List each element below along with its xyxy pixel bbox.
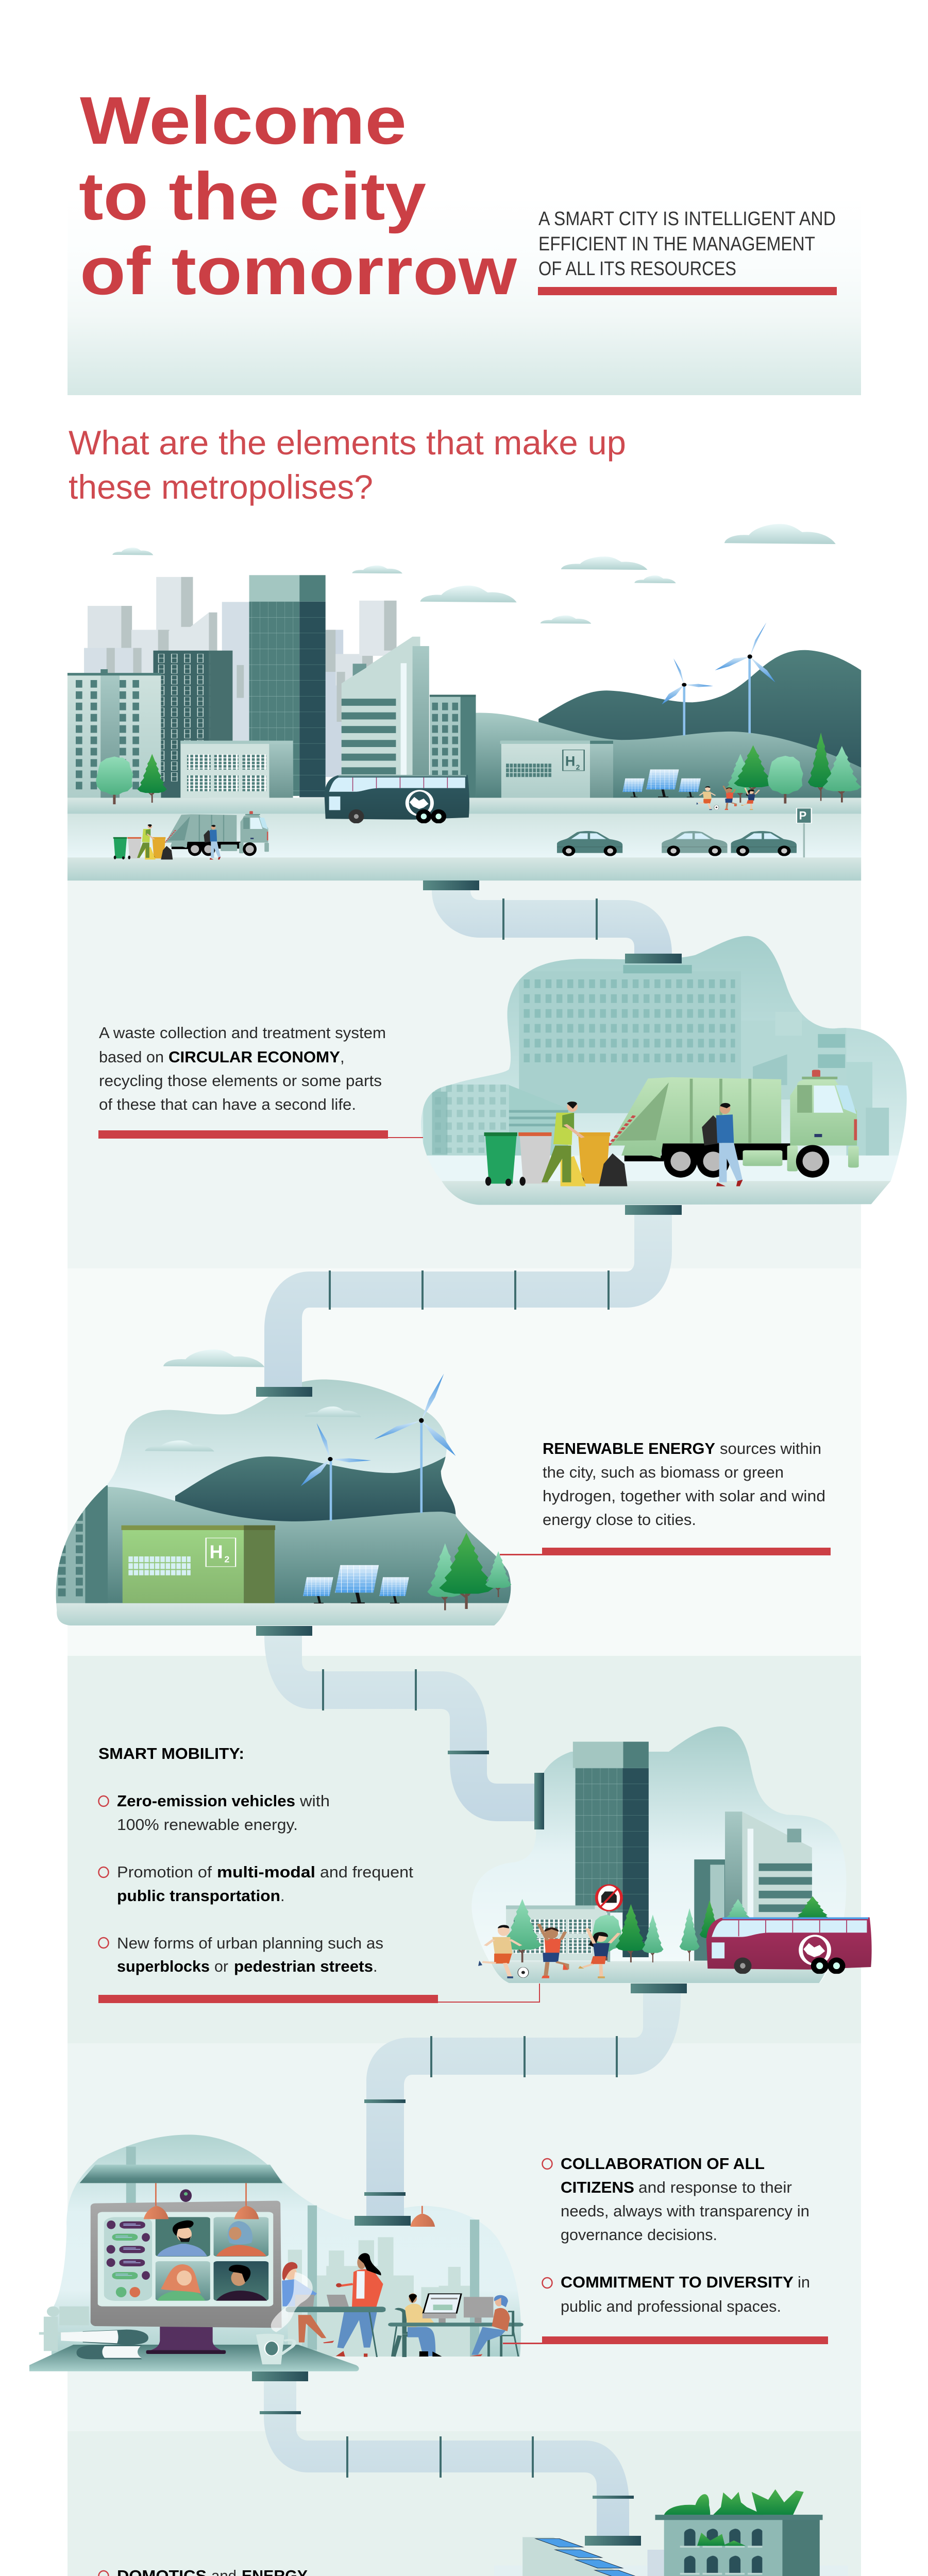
video call monitor [91,2201,282,2328]
solar panels [303,1565,409,1603]
seated woman right [470,2295,513,2357]
text: circular economy: of these that can have a second life. [99,1095,356,1113]
steaming mug [256,2272,313,2364]
left apartment block [68,669,161,798]
scene: smart mobility [471,1726,872,1983]
question heading: these metropolises? [69,468,373,506]
blob backdrop [471,1726,846,1983]
text: citizens and diversity: public and professional spaces. [561,2297,781,2315]
title: Welcome [80,82,407,158]
question heading [69,423,626,506]
no cars sign [597,1885,621,1962]
children playing [478,1924,619,1978]
desk surface [29,2345,359,2371]
dark office block [153,651,232,798]
question heading: What are the elements that make up [69,423,626,462]
wind turbines [300,1374,455,1521]
skyscraper [249,575,326,797]
scene: circular economy [414,927,917,1206]
title: to the city [79,158,426,234]
text: citizens and diversity: needs, always with transparency in [561,2202,809,2220]
text: citizens and diversity: and response to their [638,2178,792,2196]
hills [476,650,861,798]
magenta electric bus [706,1917,872,1974]
text: renewable energy: hydrogen, together with solar and wind [543,1487,825,1505]
pipe: waste to renewable [256,1205,682,1397]
text: citizens and diversity: COLLABORATION OF ALL [561,2155,765,2173]
striped building [694,1811,812,1961]
text: smart mobility: 100% renewable energy. [117,1816,298,1834]
text: smart mobility: multi-modal [217,1863,315,1881]
text: citizens and diversity: in [798,2273,810,2291]
pendant lamps [144,2183,435,2227]
text: smart mobility: superblocks [117,1957,210,1975]
scene: city panorama [68,524,861,880]
text: citizens and diversity [542,2155,810,2315]
text: renewable energy: RENEWABLE ENERGY [543,1439,715,1458]
ground [68,798,861,880]
green hydrogen plant: 2 [224,1554,229,1565]
parking sign: P [799,809,806,822]
electric bus [324,775,469,823]
hydrogen plant: 2 [576,763,580,771]
text: citizens and diversity: governance decisions. [561,2226,717,2244]
text: renewable energy: sources within [720,1439,821,1458]
text: smart mobility: SMART MOBILITY: [98,1744,244,1762]
trees [503,1896,831,1962]
truck and crew [484,1070,859,1187]
low glazed building [180,741,293,798]
hydrogen plant: H [565,754,575,769]
striped building [342,637,429,798]
pipe: renewable to mobility [256,1626,544,1829]
garbage truck and crew [113,811,269,859]
trees [96,733,861,804]
children playing [696,786,760,810]
pale background towers [84,577,397,777]
text: circular economy: A waste collection and treatment system [99,1024,386,1042]
band: domotics section [68,2431,861,2576]
band: renewable section [68,1268,861,1656]
ground [490,1961,829,1983]
intro text: EFFICIENT IN THE MANAGEMENT [538,233,815,255]
text: smart mobility: Zero-emission vehicles [117,1792,295,1810]
text: smart mobility: New forms of urban planning such as [117,1934,383,1952]
intro text: A SMART CITY IS INTELLIGENT AND [538,208,836,230]
red bar: smart mobility [98,1984,540,2003]
text: smart mobility: public transportation [117,1887,280,1905]
red bar: circular economy [98,1130,423,1139]
webcam [180,2189,192,2202]
hydrogen plant [500,741,613,798]
scene: collaboration workspace [29,2134,524,2371]
text: smart mobility: Promotion of [117,1863,212,1881]
text: renewable energy [543,1439,825,1529]
wind turbines [662,622,775,736]
title [79,82,517,309]
text: smart mobility: . [280,1887,285,1905]
right desk [388,2297,524,2357]
standing table [285,2295,385,2357]
blob backdrop [414,927,917,1206]
text: domotics and green spaces [99,2567,381,2576]
solar roof building [522,2537,648,2576]
text: renewable energy: the city, such as biomass or green [543,1463,784,1481]
text: circular economy: , [340,1048,345,1066]
text: circular economy: recycling those elements or some parts [99,1072,382,1090]
clouds [112,524,836,624]
blob backdrop [414,2566,903,2576]
text: smart mobility: with [299,1792,330,1810]
monitor stand [146,2326,226,2354]
chat column [104,2217,152,2301]
intro text: OF ALL ITS RESOURCES [538,258,736,280]
balcony plants [678,2533,761,2576]
green hydrogen plant [121,1526,275,1603]
pipe: mobility to citizens [355,1984,687,2226]
text: renewable energy: energy close to cities. [543,1511,696,1529]
seated man and monitor [394,2293,461,2357]
text: smart mobility: . [373,1957,378,1975]
blob backdrop [52,2134,521,2357]
scene: renewable energy [53,1349,521,1627]
standing woman [335,2253,383,2357]
slim building [430,694,476,798]
outer cloud [163,1349,264,1367]
text: citizens and diversity: CITIZENS [561,2178,634,2196]
rooftop solar array [535,2539,642,2576]
text: citizens and diversity: COMMITMENT TO DIVERSITY [561,2273,794,2291]
text: circular economy: based on [99,1048,164,1066]
red bar: intro [538,287,837,295]
title: of tomorrow [80,233,517,309]
books [61,2330,148,2359]
text: circular economy [99,1024,386,1113]
parked cars [557,831,797,856]
pale towers [494,2550,665,2576]
text: smart mobility [98,1744,413,1975]
ghost desk figures [39,2307,89,2351]
low building [506,1905,606,1961]
seated woman [282,2262,334,2343]
scene: green buildings [413,2489,903,2576]
trees [427,1533,511,1611]
intro text [538,208,836,280]
solar panels [622,769,701,797]
blob backdrop with hills [53,1379,521,1627]
green hydrogen plant: H [210,1541,223,1562]
caller tiles [156,2217,268,2301]
parking sign [797,808,812,857]
text: smart mobility: and frequent [320,1863,413,1881]
skyline and columns [126,2147,479,2357]
background: header panel [68,196,861,395]
text: circular economy: CIRCULAR ECONOMY [168,1048,340,1066]
rooftop garden [664,2489,804,2515]
ceiling plate [80,2165,282,2183]
vertical garden building [655,2489,823,2576]
text: smart mobility: pedestrian streets [234,1957,373,1975]
red bar: renewable energy [500,1548,831,1555]
tower [573,1742,649,1957]
red bar: citizens [503,2336,828,2344]
text: smart mobility: or [214,1957,228,1975]
band: mobility section [68,1656,861,2043]
pipe: city to waste [423,880,682,963]
pipe: citizens to domotics [252,2371,641,2546]
band: waste section [68,880,861,1268]
band: citizens section [68,2043,861,2431]
